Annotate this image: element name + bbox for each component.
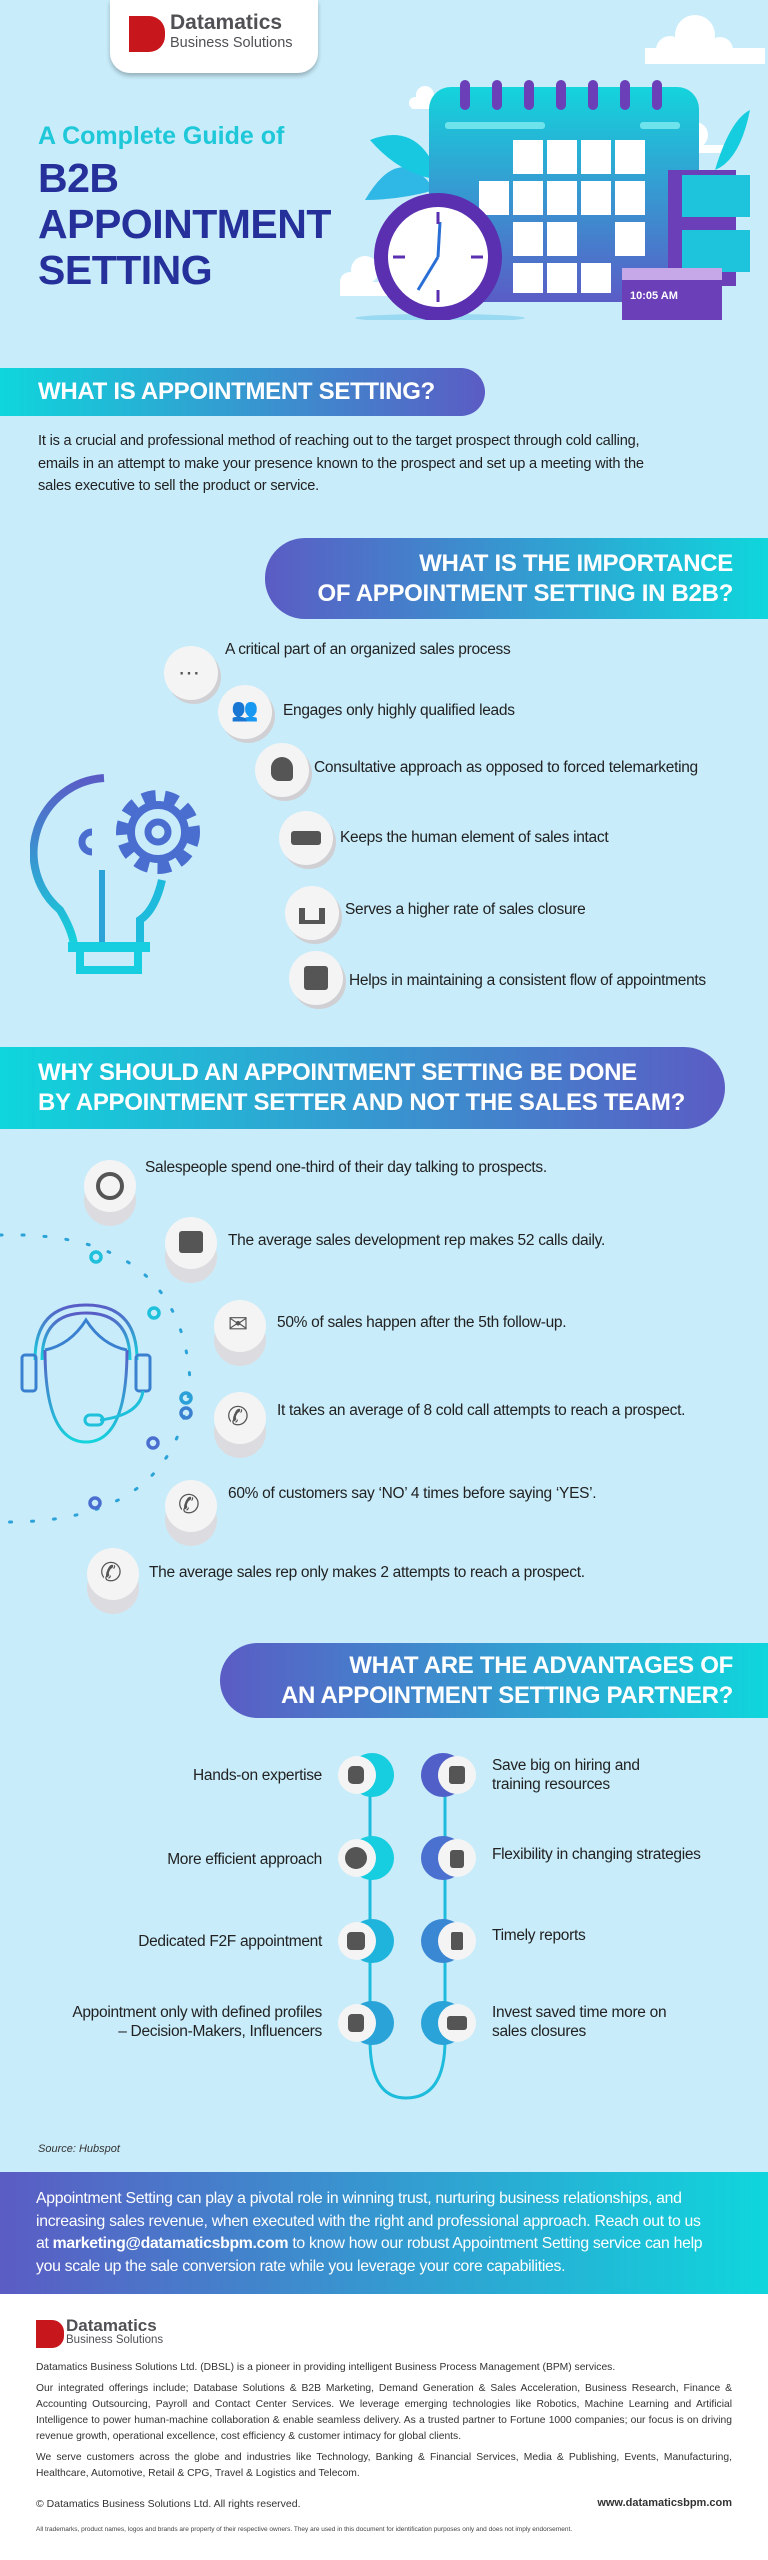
text: advantages left: Dedicated F2F appointment xyxy=(138,1933,322,1950)
banner: what is appointment setting: WHAT IS APPOINTMENT SETTING? xyxy=(38,378,435,405)
text block: definition: emails in an attempt to make your presence known to the prospect and set up a meeting with the xyxy=(38,456,644,472)
banner: why appointment setter: BY APPOINTMENT SETTER AND NOT THE SALES TEAM? xyxy=(38,1089,685,1116)
footer text: We serve customers across the globe and industries like Technology, Banking & Financial Services, Media & Publishing, Events, Manufacturing, Healthcare, Automotive, Retail & CPG, Travel & Logistics and Telecom. xyxy=(36,2452,732,2479)
banner: importance: WHAT IS THE IMPORTANCE xyxy=(419,550,733,577)
list: why items: The average sales development rep makes 52 calls daily. xyxy=(228,1232,605,1249)
title: A Complete Guide of xyxy=(38,122,284,150)
item 2 xyxy=(218,685,275,743)
brand name: Datamatics xyxy=(170,11,282,34)
item 4 xyxy=(214,1392,266,1458)
leaves xyxy=(365,167,435,200)
text: advantages right xyxy=(492,1757,701,2040)
item 6 xyxy=(289,951,346,1009)
title xyxy=(38,122,331,293)
text block: definition xyxy=(38,433,644,494)
icon: lightbulb with gear xyxy=(30,774,200,974)
item 5 xyxy=(285,886,342,944)
text: advantages right: Save big on hiring and xyxy=(492,1757,640,1774)
footer logo: Business Solutions xyxy=(66,2334,163,2346)
text: advantages right: Timely reports xyxy=(492,1927,585,1944)
item 3: ✉ xyxy=(228,1311,248,1338)
icon: logo mark xyxy=(129,16,165,52)
text: advantages left: – Decision-Makers, Influencers xyxy=(118,2023,322,2040)
list: importance items: Consultative approach as opposed to forced telemarketing xyxy=(314,759,698,776)
text block: definition: sales executive to sell the product or service. xyxy=(38,478,319,494)
title: APPOINTMENT xyxy=(38,201,331,247)
calendar xyxy=(429,87,699,302)
logo header xyxy=(110,0,318,73)
text: advantages right: Invest saved time more on xyxy=(492,2004,666,2021)
item 2: 👥 xyxy=(231,697,258,722)
list: why items: 50% of sales happen after the 5th follow-up. xyxy=(277,1314,566,1331)
list: importance items: A critical part of an organized sales process xyxy=(225,641,510,658)
item 1: ⋯ xyxy=(178,660,200,685)
banner: importance xyxy=(265,538,768,619)
hero illustration: calendar and clock xyxy=(340,15,765,320)
callout: CTA band: increasing sales revenue, when executed with the right and professional approach. Reach out to us xyxy=(36,2213,701,2230)
text: advantages left: Hands-on expertise xyxy=(193,1767,322,1784)
list: why items: It takes an average of 8 cold call attempts to reach a prospect. xyxy=(277,1402,685,1419)
list: importance items: Serves a higher rate of sales closure xyxy=(345,901,585,918)
item 6: ✆ xyxy=(100,1557,122,1587)
banner: importance: OF APPOINTMENT SETTING IN B2B? xyxy=(318,580,733,607)
icon: headset with dotted arc xyxy=(0,1234,193,1524)
brand name xyxy=(170,11,293,51)
footer logo xyxy=(36,2316,163,2348)
side cards xyxy=(668,170,736,230)
callout: CTA band xyxy=(0,2172,768,2294)
list: importance items: Helps in maintaining a consistent flow of appointments xyxy=(349,972,706,989)
text: advantages left: Appointment only with defined profiles xyxy=(72,2004,322,2021)
hero illustration: calendar and clock: 10:05 AM xyxy=(630,290,678,302)
footer text: Datamatics Business Solutions Ltd. (DBSL) is a pioneer in providing intelligent Business Process Management (BPM) services. xyxy=(36,2362,615,2373)
list: why items: Salespeople spend one-third of their day talking to prospects. xyxy=(145,1159,547,1176)
list: importance items: Keeps the human element of sales intact xyxy=(340,829,608,846)
item 5 xyxy=(165,1480,217,1546)
list: why items: The average sales rep only makes 2 attempts to reach a prospect. xyxy=(149,1564,585,1581)
text: advantages right: training resources xyxy=(492,1776,610,1793)
clock xyxy=(355,314,525,322)
title: B2B xyxy=(38,155,119,201)
banner: advantages: AN APPOINTMENT SETTING PARTNER? xyxy=(281,1682,733,1709)
footer text: Our integrated offerings include; Database Solutions & B2B Marketing, Demand Generation & Sales Acceleration, Business Research, Finance & Accounting Outsourcing, Payroll and Contact Center Services. We leverage emerging technologies like Robotics, Machine Learning and Artificial Intelligence to power human-machine collaboration & enable seamless delivery. As a trusted partner to Fortune 1000 companies; our focus is on driving revenue growth, operational excellence, cost efficiency & customer intimacy for global clients. xyxy=(36,2383,732,2442)
footer xyxy=(0,2294,768,2560)
text: advantages left xyxy=(72,1767,322,2040)
list: importance items xyxy=(164,641,706,1009)
list: importance items: Engages only highly qualified leads xyxy=(283,702,515,719)
disclaimer: All trademarks, product names, logos and brands are property of their respective owners. They are used in this document for identification purposes only and does not imply endorsement. xyxy=(36,2526,572,2533)
chart: advantages chain xyxy=(338,1753,476,2100)
callout: CTA band: you scale up the sale conversion rate while you leverage your core capabilities. xyxy=(36,2258,565,2275)
item 3 xyxy=(255,743,312,801)
text: advantages right: Flexibility in changing strategies xyxy=(492,1846,701,1863)
text block: definition: It is a crucial and professional method of reaching out to the target prospect through cold calling, xyxy=(38,433,639,449)
copyright: © Datamatics Business Solutions Ltd. All rights reserved. xyxy=(36,2498,301,2510)
item 2 xyxy=(165,1217,217,1283)
banner: what is appointment setting xyxy=(0,368,485,416)
item 3 xyxy=(214,1300,266,1366)
callout: CTA band: at marketing@datamaticsbpm.com to know how our robust Appointment Setting service can help xyxy=(36,2235,702,2252)
item 4 xyxy=(279,811,336,869)
banner: advantages xyxy=(220,1643,768,1718)
item 4: ✆ xyxy=(227,1401,249,1431)
item 6 xyxy=(87,1548,139,1614)
banner: why appointment setter: WHY SHOULD AN APPOINTMENT SETTING BE DONE xyxy=(38,1059,637,1086)
item 1 xyxy=(84,1160,136,1226)
text: advantages right: sales closures xyxy=(492,2023,586,2040)
item 1 xyxy=(164,646,221,704)
footer logo: Datamatics xyxy=(66,2316,157,2335)
banner: why appointment setter xyxy=(0,1047,725,1129)
list: why items xyxy=(84,1159,685,1614)
text: advantages left: More efficient approach xyxy=(167,1851,322,1868)
source note: Source: Hubspot xyxy=(38,2143,120,2155)
footer text xyxy=(36,2362,732,2479)
brand name: Business Solutions xyxy=(170,35,293,51)
item 5: ✆ xyxy=(178,1489,200,1519)
title: SETTING xyxy=(38,247,212,293)
callout: CTA band: Appointment Setting can play a pivotal role in winning trust, nurturing business relationships, and xyxy=(36,2190,682,2207)
website: www.datamaticsbpm.com xyxy=(597,2497,732,2509)
list: why items: 60% of customers say ‘NO’ 4 times before saying ‘YES’. xyxy=(228,1485,596,1502)
banner: advantages: WHAT ARE THE ADVANTAGES OF xyxy=(349,1652,733,1679)
